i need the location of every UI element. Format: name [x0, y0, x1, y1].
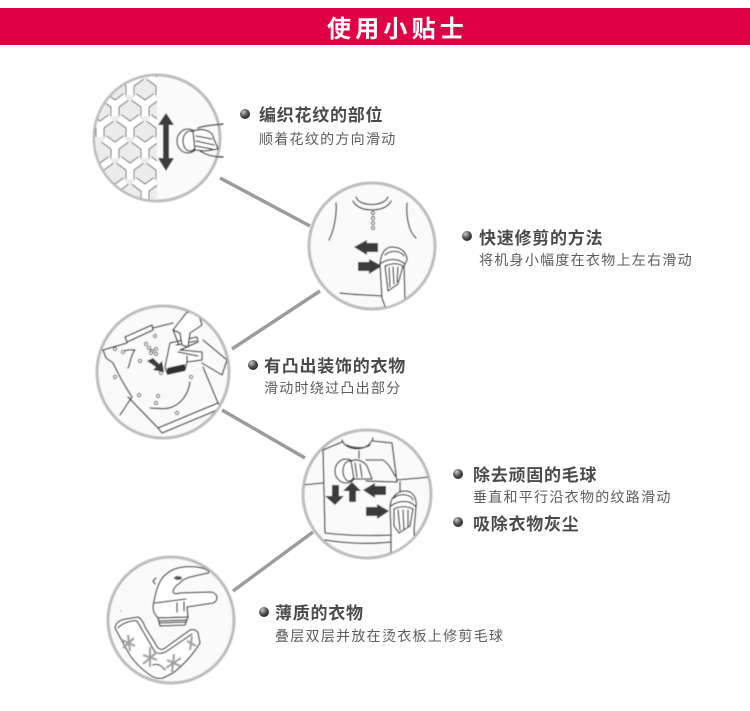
tip 1 text: 顺着花纹的方向滑动: [259, 131, 397, 147]
illustration: sweater with four arrows: [303, 430, 431, 558]
title: 使用小贴士: [327, 16, 468, 43]
arrow: up: [343, 482, 361, 502]
arrow: left: [354, 240, 378, 255]
arrow: left: [363, 483, 386, 498]
icon: hand with shaver: [390, 491, 416, 555]
tip 3 text: 滑动时绕过凸出部分: [264, 380, 402, 396]
tip 4 text: 吸除衣物灰尘: [473, 514, 580, 534]
tip 2 text: 将机身小幅度在衣物上左右滑动: [479, 252, 693, 268]
arrow: right: [358, 259, 382, 274]
tip 1 text: 编织花纹的部位: [259, 105, 383, 125]
arrow: diagonal: [147, 358, 164, 372]
arrow: up and down: [158, 113, 174, 171]
connector lines: [220, 178, 320, 591]
tip 4 text: 除去顽固的毛球: [473, 465, 597, 485]
tip 5 text: 薄质的衣物: [275, 603, 364, 623]
tip 5 text: [259, 603, 504, 644]
arrow: right: [366, 504, 389, 519]
illustration: knit pattern: [89, 70, 223, 210]
tip 1 text: [240, 105, 397, 147]
title banner: [0, 8, 750, 45]
tip 5 text: 叠层双层并放在烫衣板上修剪毛球: [275, 628, 504, 644]
illustration: shaver and sock: [108, 557, 234, 683]
tip 2 text: 快速修剪的方法: [479, 228, 603, 248]
icon: hand and shaver: [165, 312, 202, 375]
illustration: embellished sweater: [97, 306, 229, 438]
tip 2 text: [462, 228, 693, 268]
illustration: shirt with left-right arrows: [309, 183, 435, 315]
tip 3 text: 有凸出装饰的衣物: [264, 356, 406, 376]
tip 4 text: 垂直和平行沿衣物的纹路滑动: [473, 489, 672, 505]
icon: shaver on chest: [335, 459, 396, 483]
tip 4 text: [453, 465, 672, 534]
icon: hand with shaver: [380, 247, 408, 315]
icon: fabric shaver: [153, 567, 217, 626]
tip 3 text: [248, 356, 406, 396]
arrow: down: [325, 485, 344, 505]
icon: hand with shaver: [177, 124, 223, 157]
icon: sock: [115, 617, 200, 678]
